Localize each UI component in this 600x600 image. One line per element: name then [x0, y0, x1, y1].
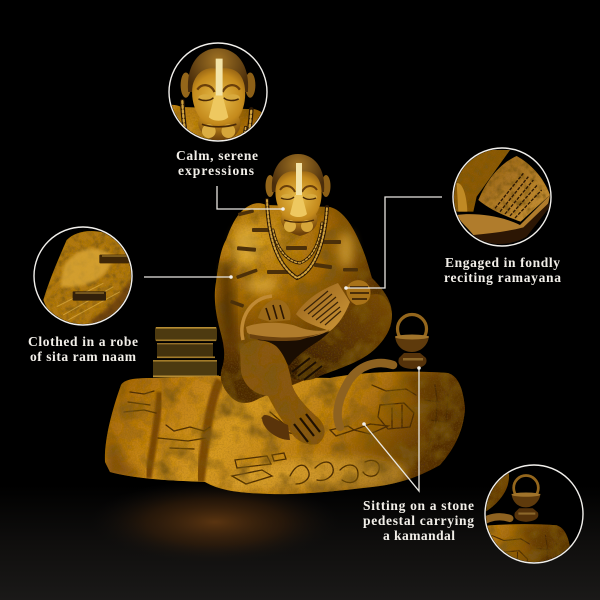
left arm, robe fold — [242, 296, 272, 340]
ear right — [322, 175, 330, 197]
kamandal — [395, 314, 429, 369]
left hand on page — [258, 300, 291, 322]
open book, right page — [296, 283, 350, 331]
head — [272, 154, 324, 236]
right hand holding book — [346, 280, 370, 305]
detail circle: open book — [453, 148, 551, 246]
right leg, fur — [286, 294, 392, 380]
caption: pedestal: a kamandal — [383, 528, 455, 543]
robe — [215, 203, 392, 403]
detail circle: robe inscriptions — [34, 227, 137, 333]
book text lines — [304, 291, 341, 325]
caption: robe: of sita ram naam — [30, 349, 137, 364]
dark recess under book — [250, 332, 352, 376]
left leg, fur — [240, 340, 325, 445]
foot on pedestal — [294, 414, 320, 442]
right hand on knee fingers — [292, 358, 322, 380]
callout line: expressions — [217, 186, 285, 211]
caption: calm expressions: Calm, serene — [176, 148, 258, 163]
caption: reciting: Engaged in fondly — [445, 255, 560, 270]
necklaces — [267, 200, 327, 278]
detail circle: kamandal — [484, 464, 584, 564]
callout lines: pedestal and kamandal — [362, 366, 421, 491]
floor — [0, 485, 600, 600]
engraved robe inscriptions — [230, 209, 358, 308]
caption: robe: Clothed in a robe — [28, 334, 138, 349]
caption: reciting: reciting ramayana — [444, 270, 561, 285]
stack of books — [153, 327, 219, 377]
tail — [338, 363, 393, 427]
stone pedestal — [105, 370, 470, 494]
caption: calm expressions: expressions — [178, 163, 254, 178]
callout line: robe — [144, 275, 233, 279]
callout line: book — [344, 197, 442, 290]
open book, cover and lower page — [246, 323, 332, 339]
statue — [105, 154, 470, 494]
ear left — [266, 175, 274, 197]
statue reflection on floor — [90, 480, 340, 564]
detail circle: face — [168, 42, 268, 142]
caption: pedestal: pedestal carrying — [363, 513, 474, 528]
robe shadow left — [220, 262, 234, 350]
caption: pedestal: Sitting on a stone — [363, 498, 474, 513]
robe highlights — [233, 226, 354, 293]
